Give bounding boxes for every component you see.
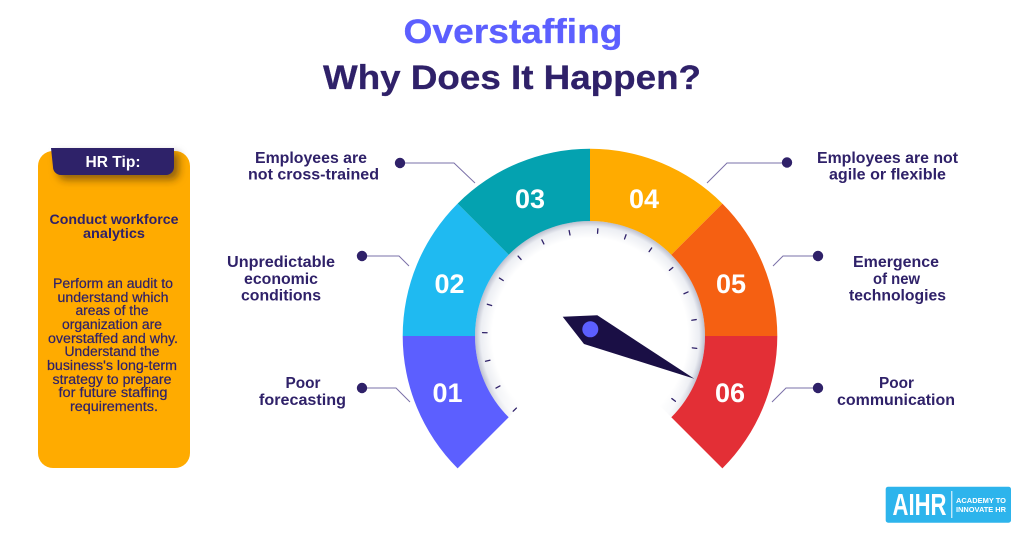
callout 05: Emergence of new technologies: Emergence [853,254,939,271]
tip body text: Perform an audit to [53,276,173,291]
tip heading: analytics [83,225,145,241]
AIHR logo: AIHR [892,487,946,522]
callout 03: Employees are not cross-trained [248,150,475,184]
segment 05 [671,204,777,336]
tip body text: overstaffed and why. [48,331,178,346]
needle [563,315,694,379]
tip body text [47,276,178,414]
callout 06: Poor communication: communication [837,392,955,409]
callout 04: Employees are not agile or flexible [707,150,958,184]
HR tip tab [51,148,174,175]
segment 04: 04 [629,184,659,214]
tick marks [483,229,697,411]
tip heading [50,211,179,241]
AIHR logo: INNOVATE HR [956,505,1007,514]
gauge [403,149,777,468]
tip body text: strategy to prepare [52,372,172,387]
segment 06: 06 [715,378,745,408]
callout 02: Unpredictable economic conditions: Unpredictable [227,254,335,271]
segment 02 [403,204,509,336]
tip body text: organization are [62,317,162,332]
callout 02: Unpredictable economic conditions: conditions [241,288,321,304]
AIHR logo [886,487,1011,523]
callout 05: Emergence of new technologies [773,251,946,304]
segment 06 [671,336,777,468]
gauge face [475,221,705,417]
title line: Why Does It Happen?: Why Does It Happen? [323,59,701,97]
tip body text: Understand the [64,344,160,359]
tip body text: business's long-term [47,358,177,373]
callout 02: Unpredictable economic conditions: economic [244,271,318,288]
callout 01: Poor forecasting: forecasting [259,392,346,409]
callout 06: Poor communication [772,375,955,409]
callout 03: Employees are not cross-trained: not cross-trained [248,166,379,184]
callout 04: Employees are not agile or flexible: agile or flexible [829,166,946,184]
callout 01: Poor forecasting [259,375,410,409]
card background [38,151,190,468]
title [323,13,701,97]
HR tip tab: HR Tip: [86,154,140,171]
AIHR logo: ACADEMY TO [956,496,1006,505]
tip body text: requirements. [70,399,158,414]
callout 02: Unpredictable economic conditions [227,251,409,304]
callout 05: Emergence of new technologies: of new [873,271,921,288]
segment 03: 03 [515,184,545,214]
callout 03: Employees are not cross-trained: Employees are [255,150,367,167]
tip body text: for future staffing [58,385,168,400]
tip heading: Conduct workforce [50,211,179,227]
segment 02: 02 [434,269,465,299]
callout 06: Poor communication: Poor [879,375,914,392]
callout 04: Employees are not agile or flexible: Employees are not [817,150,958,167]
segment 04 [590,149,722,255]
segment 05: 05 [716,269,746,299]
callout 01: Poor forecasting: Poor [286,375,320,392]
title line: Overstaffing: Overstaffing [404,13,622,51]
segment 01 [403,336,509,468]
segment 01: 01 [432,378,463,408]
panel: HR tip card [38,148,190,468]
callout 05: Emergence of new technologies: technologies [849,288,946,304]
segment 03 [458,149,590,255]
tip body text: areas of the [76,303,148,318]
tip body text: understand which [58,290,168,305]
